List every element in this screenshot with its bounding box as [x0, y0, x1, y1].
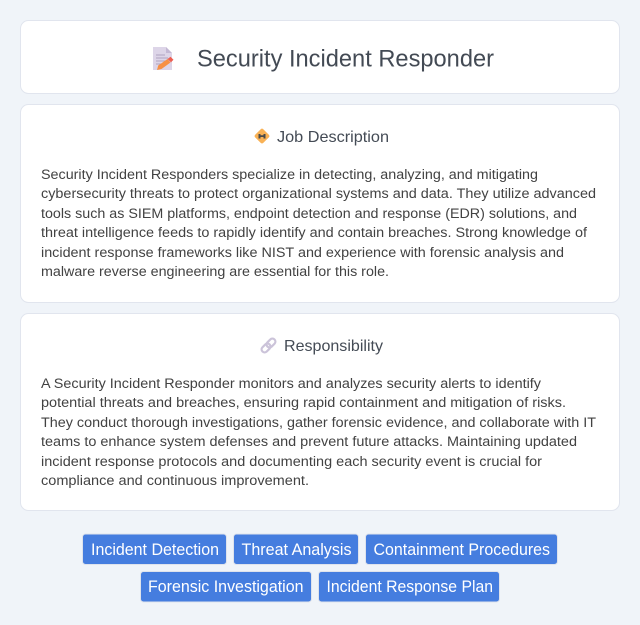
text block: job description: tools such as SIEM platforms, endpoint detection and response (EDR) solutions, and	[41, 206, 577, 222]
text block: job description: cybersecurity threats to protect organizational systems and data. They utilize advanced	[41, 186, 596, 202]
icon: diamond sign	[254, 128, 270, 144]
tag: Threat Analysis	[234, 534, 358, 564]
tag: Incident Response Plan: Incident Response Plan	[326, 578, 493, 596]
tag: Incident Detection	[82, 534, 226, 564]
tag: Containment Procedures: Containment Procedures	[374, 541, 550, 559]
panel: title header	[20, 20, 620, 94]
text block: job description: incident response frameworks like NIST and experience with forensic analysis and	[41, 245, 564, 261]
heading: responsibility: Responsibility	[284, 338, 383, 355]
panel: job description	[20, 104, 620, 302]
tag: Threat Analysis: Threat Analysis	[242, 541, 352, 559]
title: Security Incident Responder	[197, 46, 494, 72]
text block: responsibility: They conduct thorough investigations, gather forensic evidence, and collaborate with IT	[41, 415, 596, 431]
text block: job description: threat intelligence feeds to rapidly identify and contain breaches. Strong knowledge of	[41, 225, 587, 241]
text block: job description: Security Incident Responders specialize in detecting, analyzing, and mitigating	[41, 167, 538, 183]
text block: job description	[41, 167, 596, 280]
panel: responsibility	[20, 314, 620, 510]
text block: responsibility: potential threats and breaches, ensuring rapid containment and mitigation of risks.	[41, 395, 566, 411]
tag: Containment Procedures	[366, 534, 558, 564]
tag: Incident Detection: Incident Detection	[91, 541, 219, 559]
text block: responsibility	[41, 376, 596, 489]
text block: responsibility: incident response protocols and documenting each security event is crucial for	[41, 454, 542, 470]
text block: responsibility: compliance and continuous improvement.	[41, 473, 309, 489]
icon: document with pencil	[153, 47, 174, 70]
text block: job description: malware reverse engineering are essential for this role.	[41, 264, 389, 280]
heading: job description: Job Description	[277, 129, 389, 146]
icon: chain link	[260, 337, 277, 354]
tag: Incident Response Plan	[318, 572, 500, 602]
tag: Forensic Investigation: Forensic Investigation	[148, 578, 304, 596]
text block: responsibility: A Security Incident Responder monitors and analyzes security alerts to identify	[41, 376, 542, 392]
text block: responsibility: teams to enhance system defenses and prevent future attacks. Maintaining updated	[41, 434, 577, 450]
tag: Forensic Investigation	[140, 572, 312, 602]
